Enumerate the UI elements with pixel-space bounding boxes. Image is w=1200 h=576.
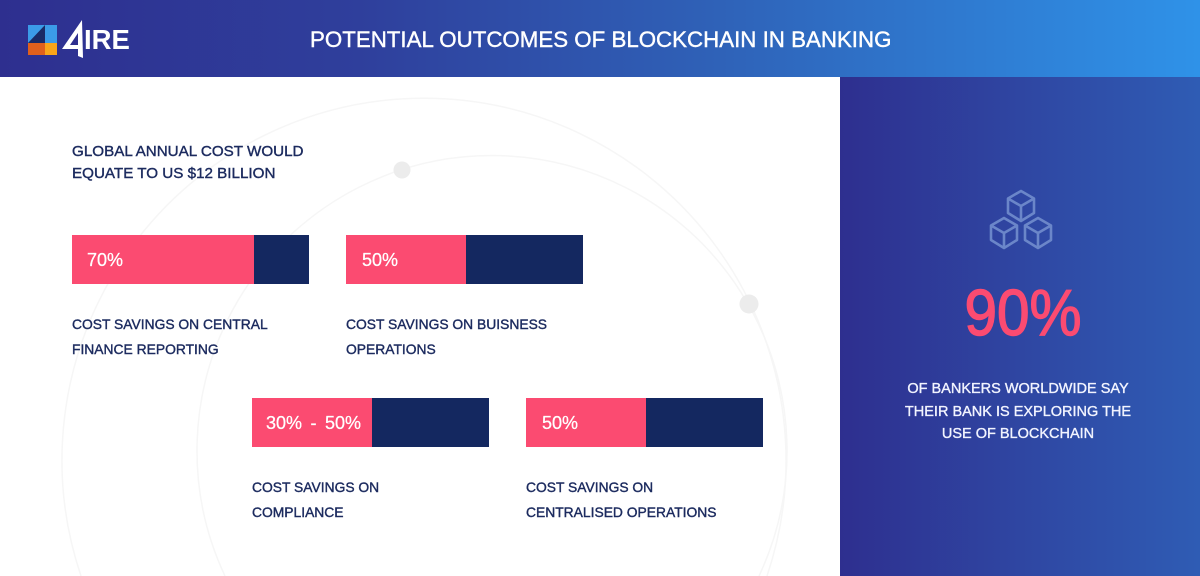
bar: 70%	[72, 235, 309, 284]
statistic description: THEIR BANK IS EXPLORING THE	[905, 404, 1131, 420]
logo: 4IRE: IRE	[84, 24, 130, 55]
label: central finance reporting	[72, 316, 268, 357]
intro heading: EQUATE TO US $12 BILLION	[72, 165, 275, 182]
intro heading: GLOBAL ANNUAL COST WOULD	[72, 143, 304, 160]
label: business operations	[346, 316, 547, 357]
label: compliance: COST SAVINGS ON	[252, 479, 379, 495]
bar: 50% centralised operations	[526, 398, 763, 447]
label: compliance	[252, 479, 379, 520]
bar: 70%: 70%	[87, 250, 123, 270]
logo: 4IRE	[28, 20, 130, 58]
intro heading	[72, 143, 304, 182]
header band	[0, 0, 1200, 77]
label: business operations: OPERATIONS	[346, 341, 436, 357]
label: business operations: COST SAVINGS ON BUISNESS	[346, 316, 547, 332]
title: POTENTIAL OUTCOMES OF BLOCKCHAIN IN BANKING	[310, 27, 891, 52]
bar: 50% centralised operations: 50%	[542, 413, 578, 433]
bar: 50% business operations: 50%	[362, 250, 398, 270]
statistic description: USE OF BLOCKCHAIN	[942, 426, 1094, 442]
label: centralised operations	[526, 479, 717, 520]
label: centralised operations: CENTRALISED OPERATIONS	[526, 504, 717, 520]
statistic description: OF BANKERS WORLDWIDE SAY	[907, 381, 1129, 397]
label: compliance: COMPLIANCE	[252, 504, 344, 520]
panel: 90% statistic	[840, 77, 1200, 576]
bar: 30-50%	[252, 398, 489, 447]
bar: 50% business operations	[346, 235, 583, 284]
icon: blockchain cubes	[990, 190, 1052, 250]
label: central finance reporting: FINANCE REPORTING	[72, 341, 219, 357]
statistic description	[905, 381, 1131, 442]
big number 90%: 90%	[964, 276, 1081, 349]
background orbit circles	[62, 98, 788, 576]
label: centralised operations: COST SAVINGS ON	[526, 479, 653, 495]
bar: 30-50%: 30% - 50%	[266, 413, 361, 433]
label: central finance reporting: COST SAVINGS ON CENTRAL	[72, 316, 268, 332]
